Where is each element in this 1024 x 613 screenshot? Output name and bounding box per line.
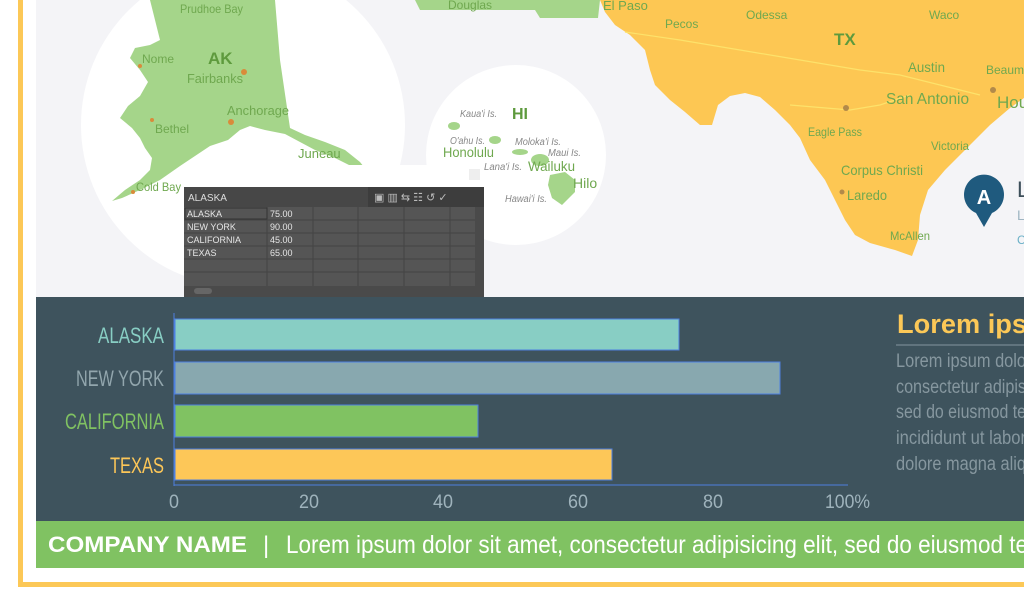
footer bar: COMPANY NAME [48,532,247,557]
region: texas [448,0,1024,256]
inset circle: hawaii: Kaua'i Is. [460,109,497,120]
bar chart: 100% [825,492,870,513]
region: texas: Eagle Pass [808,125,862,139]
data table window: TEXAS [187,248,217,258]
inset circle: alaska: Fairbanks [187,71,243,86]
inset circle: hawaii: Lana'i Is. [484,162,522,173]
inset circle: alaska: Nome [142,52,174,66]
region: texas: Austin [908,59,945,75]
chart panel [36,297,1024,521]
inset circle: hawaii [426,65,606,245]
inset circle: hawaii: Hawai'i Is. [505,194,547,205]
region: new mexico [415,0,600,18]
bar chart: NEW YORK [76,366,164,391]
inset circle: hawaii: Maui Is. [548,148,581,159]
data table window [184,165,484,297]
region: texas: Pecos [665,17,698,31]
inset circle: alaska: Juneau [298,146,341,161]
bar chart: TEXAS [110,453,164,478]
data table window: 65.00 [270,248,293,258]
data table window: NEW YORK [187,222,236,232]
inset circle: hawaii: O'ahu Is. [450,136,485,147]
region: texas: McAllen [890,229,930,243]
text block: lorem: Lorem ips [897,309,1024,339]
data table window: 75.00 [270,209,293,219]
region: texas: Corpus Christi [841,162,923,178]
region: texas: San Antonio [886,91,969,108]
inset circle: hawaii: Wailuku [528,158,575,174]
region: texas: Waco [929,8,960,22]
bar chart: 80 [703,492,723,513]
text block: lorem [896,309,1024,475]
map area [36,0,1024,297]
inset circle: alaska: Cold Bay [136,180,181,194]
inset circle: hawaii: Honolulu [443,144,494,160]
inset circle: alaska: AK [208,49,233,68]
data table window: ALASKA [188,193,227,204]
bar chart: 20 [299,492,319,513]
region: texas: Laredo [847,187,887,203]
inset circle: alaska: Prudhoe Bay [180,2,243,16]
bar chart: CALIFORNIA [65,409,164,434]
region: texas: Victoria [931,139,969,153]
icon: location pin A [964,175,1024,247]
data table window: ALASKA [187,209,222,219]
inset circle: alaska: Anchorage [227,103,289,118]
bar chart [65,313,870,513]
inset circle: alaska: Bethel [155,122,189,136]
inset circle: alaska [81,0,405,287]
bar chart: ALASKA [98,323,164,348]
region: texas: TX [834,30,856,49]
data table window: ▣ ▥ ⇆ ☷ ↺ ✓ [374,192,448,204]
region: texas: Odessa [746,8,788,22]
footer bar: | [263,532,269,559]
footer bar [36,521,1024,568]
bar chart: 40 [433,492,453,513]
icon: location pin A: A [977,187,991,209]
bar chart: 60 [568,492,588,513]
inset circle: hawaii: Hilo [573,175,597,191]
data table window: 90.00 [270,222,293,232]
inset circle: hawaii: Moloka'i Is. [515,137,561,148]
bar chart: 0 [169,492,179,513]
data table window: 45.00 [270,235,293,245]
data table window: CALIFORNIA [187,235,241,245]
inset circle: hawaii: HI [512,106,528,123]
